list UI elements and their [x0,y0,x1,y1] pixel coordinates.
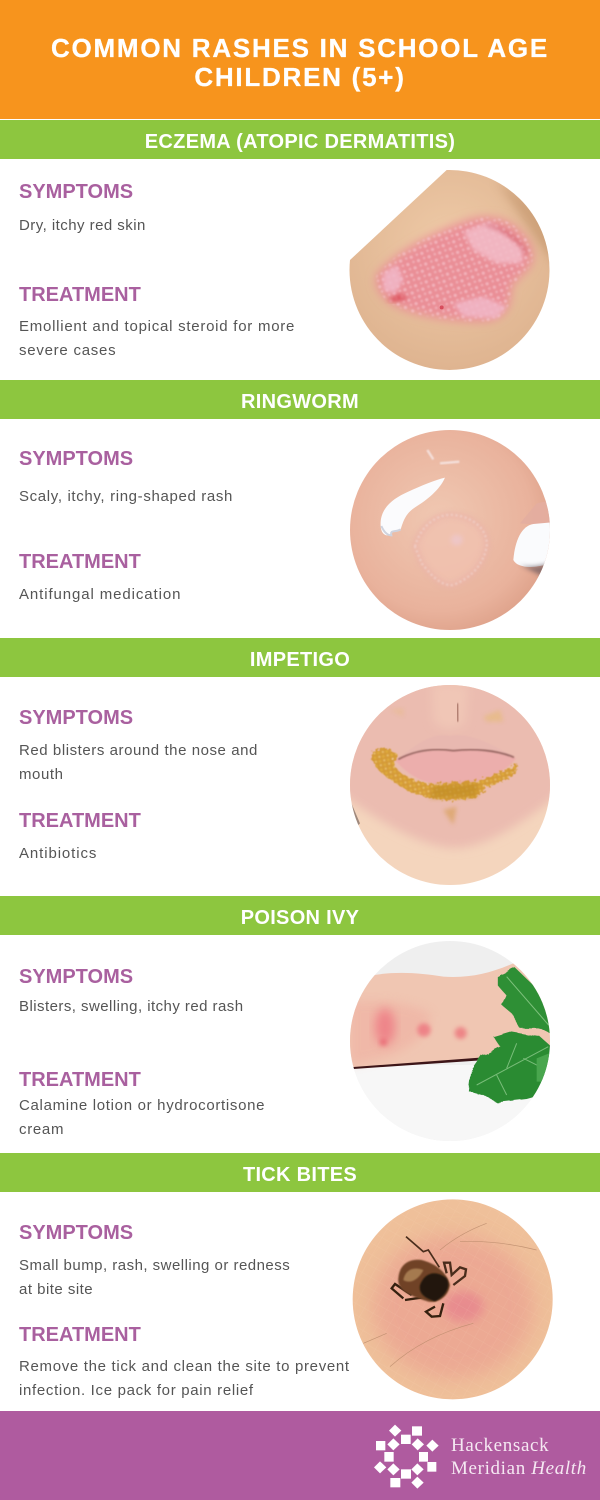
eczema treatment heading: TREATMENT [19,284,141,306]
poison ivy treatment text: cream [19,1121,64,1138]
photo: impetigo around mouth [350,685,550,885]
impetigo symptoms text: Red blisters around the nose and [19,742,258,759]
tick bites treatment text: infection. Ice pack for pain relief [19,1382,254,1399]
tick bites symptoms text [19,1257,290,1298]
ringworm symptoms heading: SYMPTOMS [19,448,133,470]
logo: Hackensack Meridian Health mark [374,1424,439,1489]
title [0,0,600,119]
ringworm symptoms text: Scaly, itchy, ring-shaped rash [19,488,233,505]
tick bites symptoms text: at bite site [19,1281,93,1298]
tick bites treatment heading: TREATMENT [19,1324,141,1346]
eczema treatment text [19,318,295,359]
heading: impetigo [0,638,600,677]
title: CHILDREN (5+) [194,62,406,92]
poison ivy treatment text: Calamine lotion or hydrocortisone [19,1097,265,1114]
impetigo treatment text: Antibiotics [19,845,97,862]
impetigo treatment heading: TREATMENT [19,810,141,832]
eczema treatment text: severe cases [19,342,116,359]
poison ivy symptoms text: Blisters, swelling, itchy red rash [19,998,244,1015]
tick bites treatment text: Remove the tick and clean the site to prevent [19,1358,350,1375]
eczema treatment text: Emollient and topical steroid for more [19,318,295,335]
logo wordmark [451,1435,587,1479]
tick bites symptoms text: Small bump, rash, swelling or redness [19,1257,290,1274]
heading: tick bites: TICK BITES [243,1164,357,1186]
tick bites treatment text [19,1358,350,1399]
eczema symptoms heading: SYMPTOMS [19,181,133,203]
photo: poison ivy on arm with leaves [350,941,550,1141]
impetigo symptoms heading: SYMPTOMS [19,707,133,729]
impetigo symptoms text: mouth [19,766,64,783]
photo: eczema on skin [350,170,550,370]
ringworm treatment heading: TREATMENT [19,551,141,573]
poison ivy treatment heading: TREATMENT [19,1069,141,1091]
ringworm treatment text: Antifungal medication [19,586,181,603]
photo: tick on reddened skin [352,1199,553,1400]
heading: tick bites [0,1153,600,1192]
photo: ringworm with cream [350,430,550,630]
poison ivy symptoms heading: SYMPTOMS [19,966,133,988]
tick bites symptoms heading: SYMPTOMS [19,1222,133,1244]
logo wordmark: Meridian Health [451,1458,587,1479]
title: COMMON RASHES IN SCHOOL AGE [51,33,549,63]
heading: poison ivy: POISON IVY [241,907,359,929]
logo wordmark: Hackensack [451,1435,549,1456]
heading: impetigo: IMPETIGO [250,649,350,671]
heading: poison ivy [0,896,600,935]
heading: ringworm: RINGWORM [241,391,359,413]
footer band [0,1411,600,1500]
heading: ringworm [0,380,600,419]
impetigo symptoms text [19,742,258,783]
heading: eczema [0,120,600,159]
poison ivy treatment text [19,1097,265,1138]
heading: eczema: ECZEMA (ATOPIC DERMATITIS) [145,131,455,153]
eczema symptoms text: Dry, itchy red skin [19,217,146,234]
